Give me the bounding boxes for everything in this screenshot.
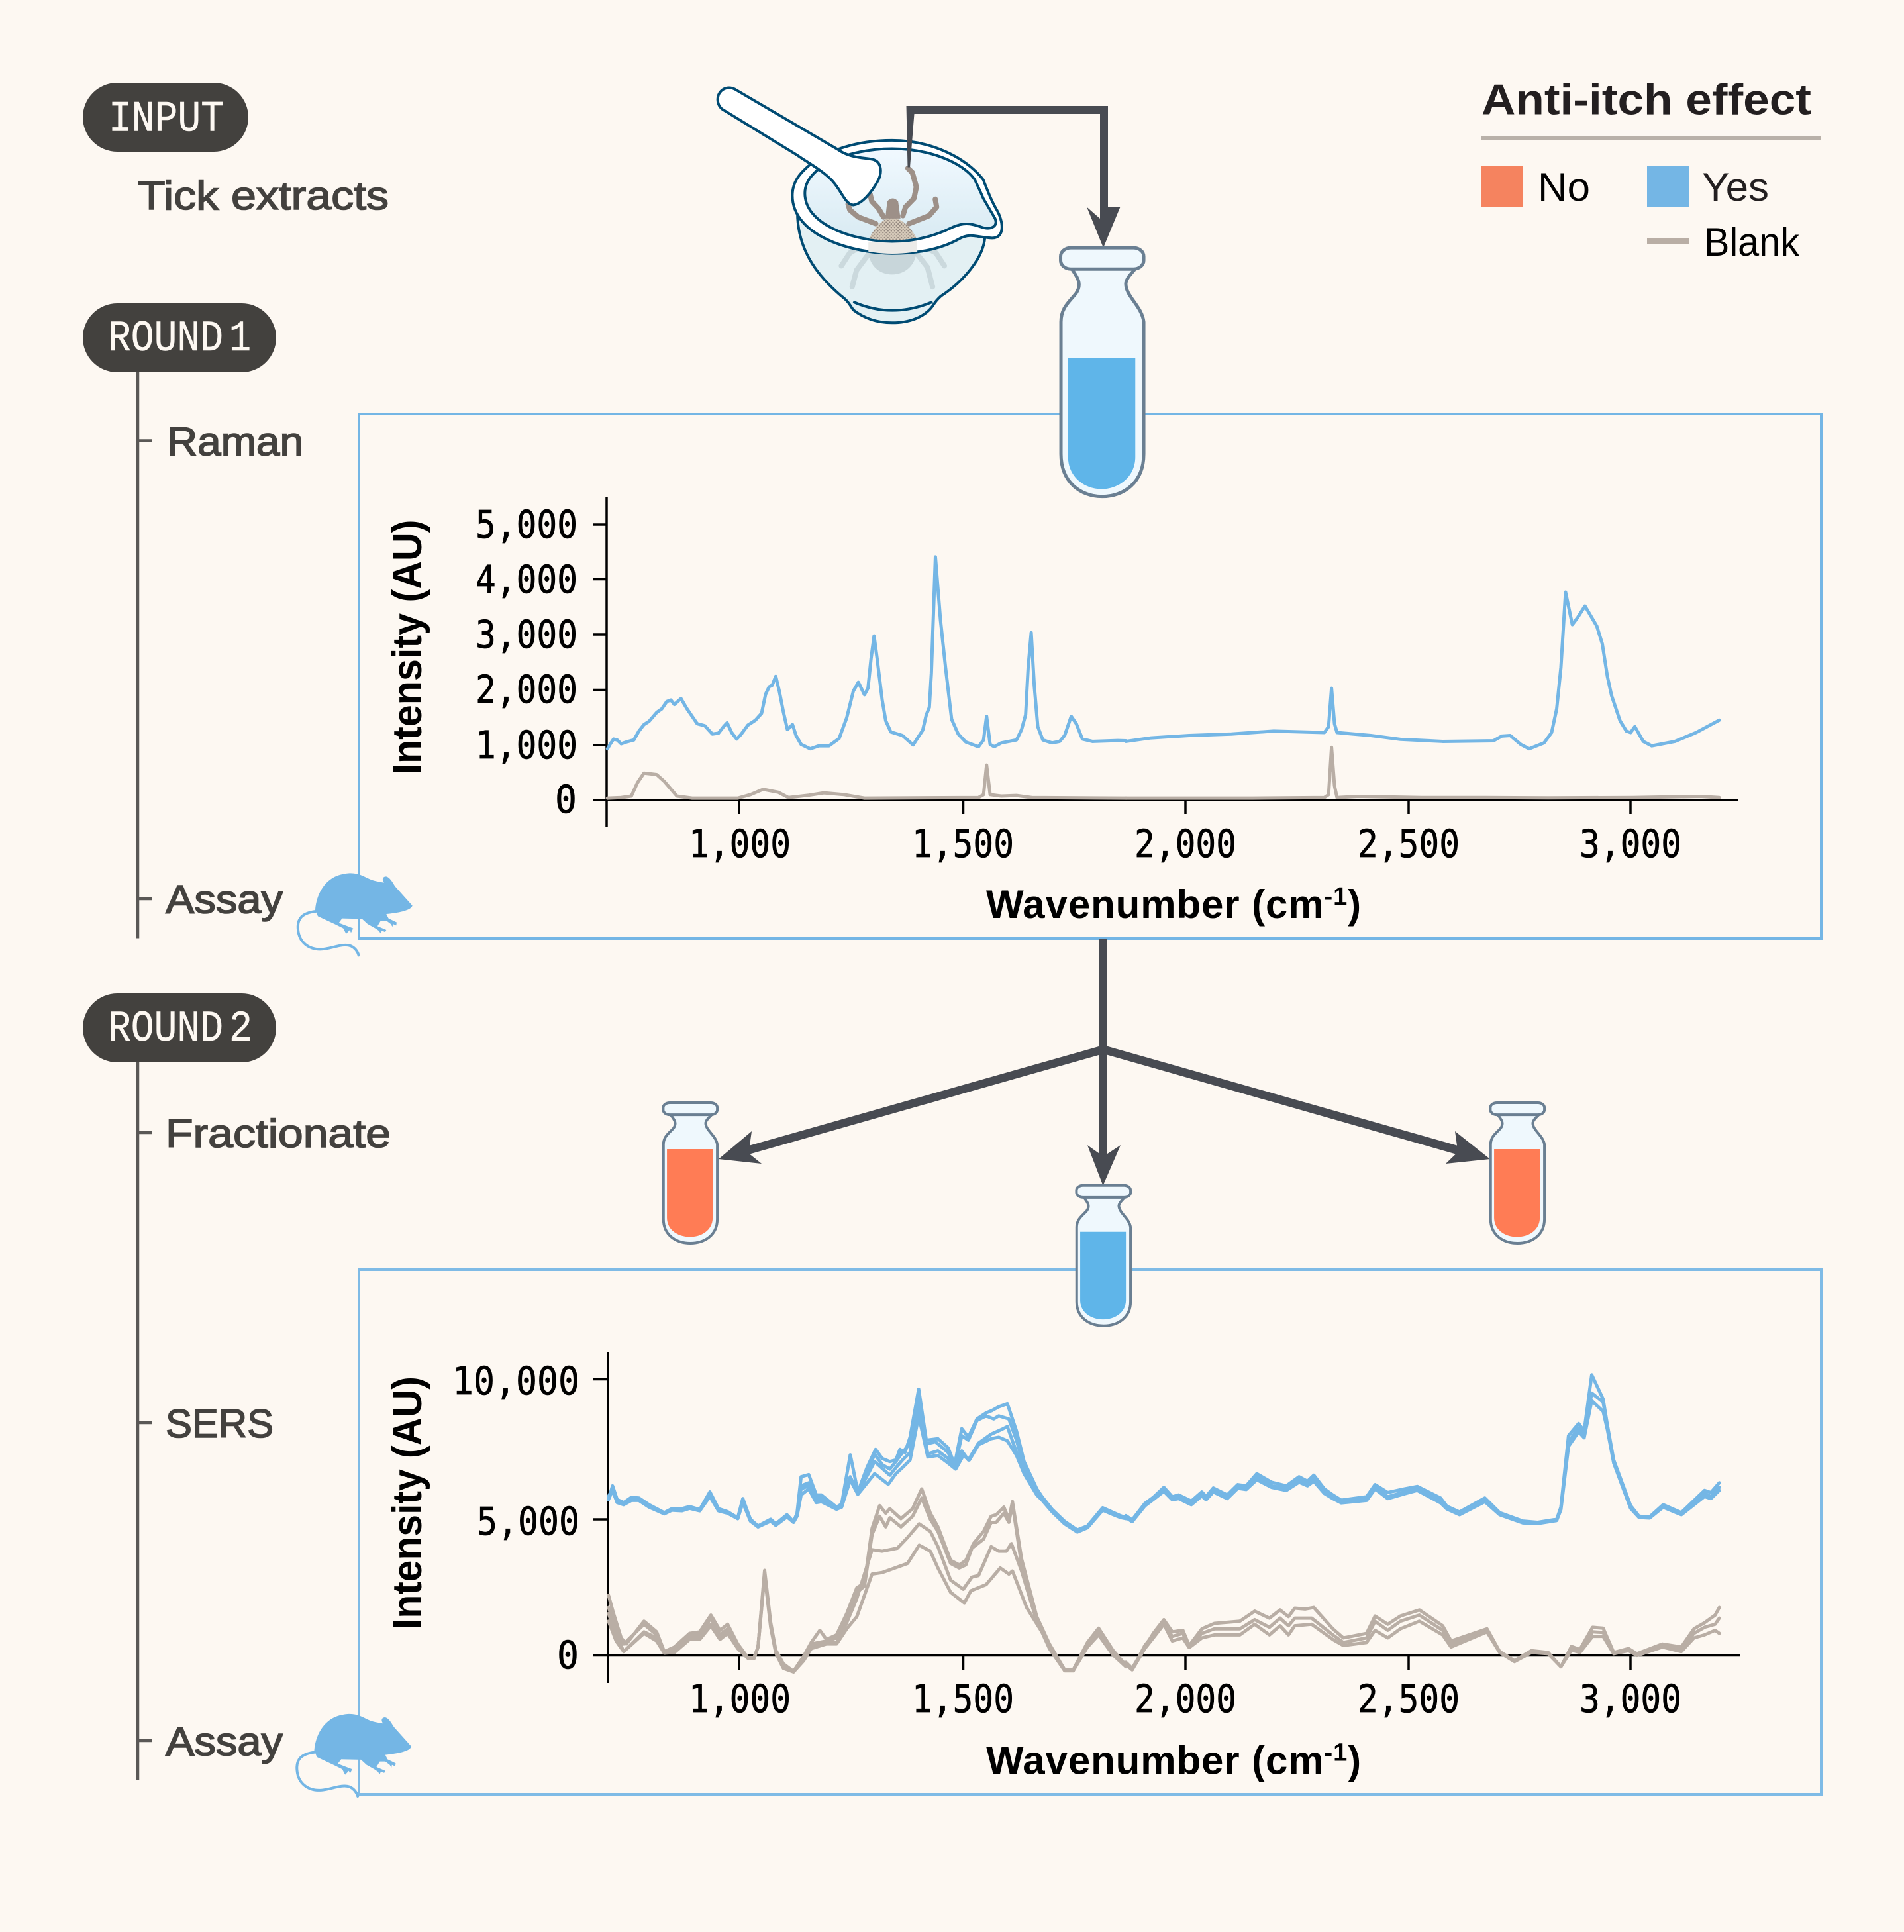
swatch: Blank: [1647, 238, 1689, 244]
tick: [848, 168, 936, 240]
text: Tick extracts: Tick extracts: [138, 174, 389, 218]
label: Fractionate: Fractionate: [166, 1111, 391, 1156]
label: Raman: Raman: [167, 420, 303, 464]
pill: ROUND 1: [83, 303, 276, 372]
legend label: Yes: Yes: [1702, 165, 1769, 209]
arrow to right vial: [1103, 1045, 1490, 1164]
legend title: Anti-itch effect: [1481, 76, 1811, 123]
x tick labels: 2,500: [1358, 821, 1460, 866]
y tick labels: 0: [557, 1633, 579, 1678]
pill: ROUND 1: ROUND: [108, 314, 223, 364]
y tick labels: 5,000: [477, 1499, 579, 1544]
legend label: Blank: Blank: [1704, 220, 1800, 264]
panel: SERS: [359, 1270, 1821, 1794]
x tick labels: [689, 821, 1681, 866]
x tick labels: 1,000: [689, 821, 791, 866]
icon: mouse round 2: [297, 1714, 411, 1796]
panel: Raman: [359, 414, 1821, 939]
pill: INPUT: INPUT: [109, 94, 224, 144]
blue liquid: [1068, 358, 1135, 489]
label: Assay round 1: Assay: [166, 877, 283, 922]
x tick labels: 1,000: [689, 1676, 791, 1721]
icon: vial right (no effect): [1490, 1103, 1544, 1243]
x tick labels: 1,500: [912, 821, 1014, 866]
swatch: Yes: [1647, 166, 1689, 207]
y tick labels: 10,000: [452, 1358, 579, 1403]
pill: ROUND 2: ROUND: [108, 1004, 223, 1054]
x axis title: ): [1348, 882, 1362, 927]
y axis title: Intensity (AU): [385, 1376, 430, 1629]
legend label: No: No: [1538, 165, 1590, 209]
x tick labels: 3,000: [1579, 1676, 1681, 1721]
x tick labels: 3,000: [1579, 821, 1681, 866]
axes and ticks: [593, 497, 1738, 827]
icon: mortar, pestle and tick: [718, 87, 1002, 323]
x axis title: Wavenumber (cm: [986, 1738, 1325, 1783]
y tick labels: 0: [555, 777, 577, 822]
x axis title: Wavenumber (cm: [986, 882, 1325, 927]
y tick labels: [452, 1358, 579, 1678]
blank trace: [607, 747, 1719, 798]
y tick labels: 3,000: [476, 612, 577, 657]
timeline: round 1: [138, 372, 152, 938]
timeline: round 2: [138, 1062, 152, 1780]
x axis title: -1: [1325, 1739, 1348, 1767]
y tick labels: 1,000: [476, 723, 577, 768]
label: Assay round 2: Assay: [166, 1719, 283, 1764]
pill: ROUND 2: [83, 993, 276, 1062]
mortar bowl: [797, 213, 985, 323]
label: SERS: SERS: [166, 1401, 274, 1446]
pill: INPUT: [83, 83, 248, 152]
x tick labels: [689, 1676, 1681, 1721]
x tick labels: 2,000: [1134, 1676, 1236, 1721]
arrows: fractionation: [719, 939, 1490, 1186]
y tick labels: 5,000: [476, 502, 577, 547]
x tick labels: 2,500: [1358, 1676, 1460, 1721]
pill: ROUND 2: 2: [229, 1004, 252, 1054]
y axis title: Intensity (AU): [385, 519, 430, 775]
y tick labels: 2,000: [476, 667, 577, 712]
mortar rim: [792, 140, 1002, 254]
yes traces: [609, 1375, 1719, 1532]
ghost tick seen through bowl: [841, 243, 944, 287]
arrow: mortar to large vial: [906, 106, 1121, 248]
y tick labels: 4,000: [476, 557, 577, 602]
chart: Raman spectrum: [385, 497, 1738, 927]
x tick labels: 2,000: [1134, 821, 1236, 866]
icon: vial left (no effect): [663, 1103, 717, 1243]
x axis title: ): [1348, 1738, 1362, 1783]
swatch: No: [1481, 166, 1523, 207]
chart: SERS spectrum: [385, 1352, 1740, 1783]
icon: large vial: [1061, 248, 1144, 497]
icon: vial centre (anti-itch effect): [1076, 1186, 1130, 1326]
arrow to left vial: [719, 1045, 1103, 1164]
axes and ticks: [593, 1352, 1740, 1683]
x tick labels: 1,500: [912, 1676, 1014, 1721]
blank traces: [609, 1489, 1719, 1672]
yes trace: [607, 557, 1719, 749]
icon: mouse round 1: [298, 873, 413, 955]
pestle: [718, 87, 881, 205]
y tick labels: [476, 502, 577, 822]
legend: [1481, 76, 1821, 264]
x axis title: -1: [1325, 883, 1348, 911]
pill: ROUND 1: 1: [229, 314, 251, 364]
